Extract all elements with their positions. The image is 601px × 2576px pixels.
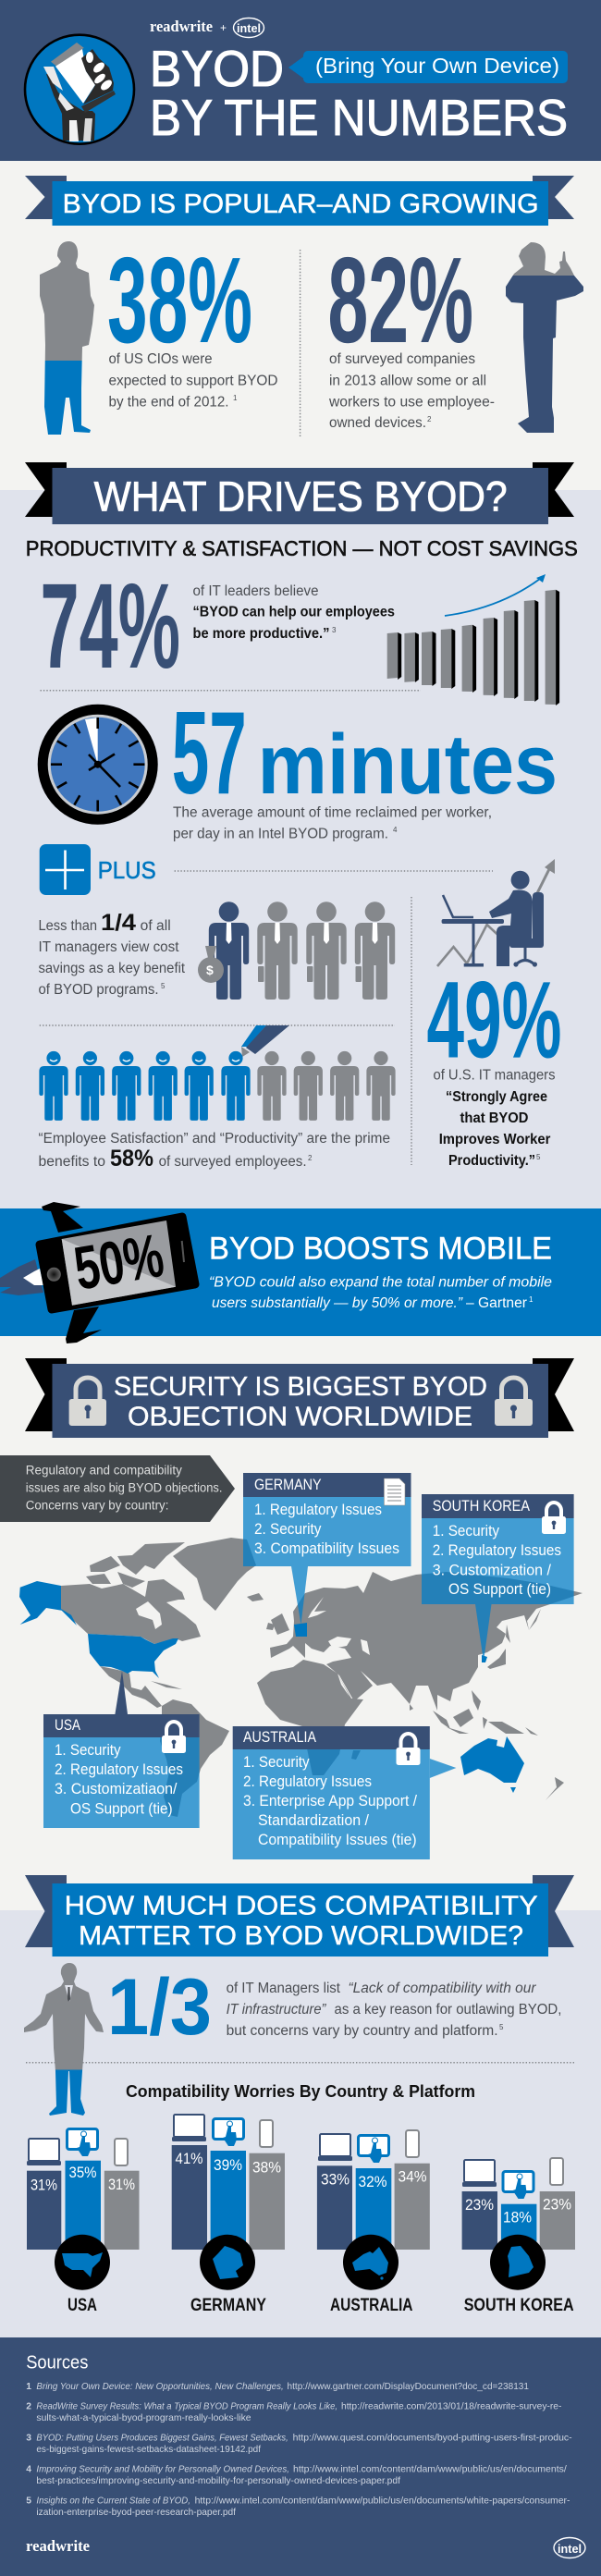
world map <box>19 1538 583 1817</box>
stat: 49 percent: Improves Worker <box>439 1132 550 1147</box>
quote: “BYOD could also expand the total number of mobile <box>209 1275 552 1291</box>
stat: 57 minutes: The average amount of time reclaimed per worker, <box>173 804 492 820</box>
logo: intel <box>233 18 264 37</box>
panel: BYOD boosts mobile <box>0 1202 601 1343</box>
stat: one third <box>107 1963 561 2052</box>
text: employee satisfaction: benefits to <box>39 1154 105 1170</box>
chart: USA <box>27 2128 139 2315</box>
stat: 74 percent: 74% <box>41 558 180 693</box>
callout: Australia: 1. Security <box>243 1754 310 1771</box>
chart: Germany: 39% <box>214 2156 242 2174</box>
icon: right lock <box>495 1378 533 1426</box>
chart: USA: 31% <box>31 2176 57 2193</box>
source 4 <box>26 2464 567 2486</box>
stat: 74 percent: 3 <box>332 626 337 634</box>
text: less than one quarter: Less than <box>39 918 97 934</box>
stat: 57 minutes: minutes <box>258 718 558 812</box>
source 5 <box>26 2496 570 2518</box>
stat: 82 percent: 2 <box>427 415 432 423</box>
callout: Australia: AUSTRALIA <box>243 1728 317 1746</box>
source 5: Insights on the Current State of BYOD, <box>36 2496 190 2506</box>
pictogram: four managers <box>198 902 395 1000</box>
callout: bring your own device: (Bring Your Own Device) <box>315 54 559 78</box>
text: employee satisfaction: 58% <box>110 1146 153 1171</box>
source 4: 4 <box>26 2464 31 2474</box>
stat: 38 percent: expected to support BYOD <box>109 374 277 388</box>
figure: man on phone <box>506 242 583 433</box>
text: less than one quarter: savings as a key benefit <box>39 961 186 976</box>
callout: regulatory intro: Regulatory and compatibility <box>26 1463 182 1477</box>
icon: rocket phone <box>0 1202 195 1343</box>
chart: Germany: 38% <box>252 2158 281 2177</box>
icon: worker at desk with rising chart <box>437 859 555 967</box>
quote: – Gartner <box>466 1295 527 1311</box>
source 3: 3 <box>26 2433 31 2443</box>
stat: 38 percent: of US CIOs were <box>109 351 213 367</box>
source 5: http://www.intel.com/content/dam/www/public/us/en/documents/white-papers/consumer- <box>195 2496 570 2506</box>
chart title: Compatibility Worries By Country & Platform <box>126 2082 475 2101</box>
stat: 82 percent: owned devices. <box>329 415 426 431</box>
chart: rising 3D bars <box>387 574 559 705</box>
source 1 <box>26 2382 529 2392</box>
stat: 49 percent: that BYOD <box>460 1110 529 1126</box>
callout: Australia: Standardization / <box>258 1812 369 1829</box>
source 3: es-biggest-gains-fewest-setbacks-datasheet-19142.pdf <box>36 2445 261 2455</box>
callout: USA <box>43 1671 200 1828</box>
callout: regulatory intro: Concerns vary by country: <box>26 1499 168 1513</box>
icon: clock <box>38 705 158 825</box>
callout: South Korea: OS Support (tie) <box>448 1581 551 1598</box>
figure: shrugging man <box>24 1963 104 2116</box>
banner: what drives BYOD: WHAT DRIVES BYOD? <box>94 473 508 521</box>
source 2 <box>26 2401 561 2423</box>
callout: bring your own device <box>288 51 568 83</box>
panel: header <box>0 0 601 161</box>
callout: South Korea <box>422 1494 574 1662</box>
manager navy with money bag: $ <box>206 963 214 977</box>
stat: 57 minutes: per day in an Intel BYOD program. <box>173 827 388 842</box>
banner: security: OBJECTION WORLDWIDE <box>128 1403 472 1432</box>
callout: regulatory intro: issues are also big BYOD objections. <box>26 1480 222 1494</box>
source 3: BYOD: Putting Users Produces Biggest Gains, Fewest Setbacks, <box>36 2433 288 2443</box>
manager grey <box>355 902 395 1000</box>
text: less than one quarter: of BYOD programs. <box>39 982 159 998</box>
stat: 57 minutes: 57 <box>172 687 247 818</box>
callout: South Korea: 1. Security <box>433 1523 500 1539</box>
chart: South Korea <box>462 2158 575 2315</box>
callout: Germany: 3. Compatibility Issues <box>254 1540 399 1557</box>
text: employee satisfaction: 2 <box>308 1154 313 1162</box>
stat: 82 percent <box>327 232 495 431</box>
banner: compatibility: HOW MUCH DOES COMPATIBILITY <box>65 1892 538 1921</box>
banner: what drives BYOD <box>25 462 574 524</box>
banner: compatibility <box>25 1875 574 1957</box>
source 5: 5 <box>26 2496 31 2506</box>
text: less than one quarter: 5 <box>161 982 166 990</box>
pictogram: ten employees, six highlighted <box>39 1051 396 1121</box>
logo plus sign: + <box>220 21 227 34</box>
figure: man grey and blue <box>40 241 94 435</box>
callout: USA: 3. Customizatiaon/ <box>55 1781 178 1797</box>
panel: sources <box>0 2337 601 2576</box>
source 1: http://www.gartner.com/DisplayDocument?doc_cd=238131 <box>287 2382 529 2392</box>
stat: one third: as a key reason for outlawing BYOD, <box>335 2002 561 2018</box>
text: employee satisfaction: “Employee Satisfaction” and “Productivity” are the prime <box>39 1131 390 1147</box>
chart: South Korea: SOUTH KOREA <box>464 2296 574 2315</box>
callout: USA: 2. Regulatory Issues <box>55 1761 183 1778</box>
stat: 49 percent <box>427 959 562 1169</box>
callout: Germany: 1. Regulatory Issues <box>254 1502 382 1518</box>
stat: 82 percent: workers to use employee- <box>328 394 495 411</box>
stat: 82 percent: in 2013 allow some or all <box>329 374 486 388</box>
source 2: ReadWrite Survey Results: What a Typical BYOD Program Really Looks Like, <box>36 2401 337 2411</box>
banner: BYOD is popular <box>25 176 574 226</box>
text: less than one quarter: of all <box>141 918 171 934</box>
subheading: PRODUCTIVITY & SATISFACTION — NOT COST SAVINGS <box>26 536 578 560</box>
quote: 1 <box>529 1295 534 1304</box>
source 4: Improving Security and Mobility for Personally Owned Devices, <box>36 2464 289 2474</box>
stat: one third: of IT Managers list <box>227 1981 341 1996</box>
stat: 57 minutes <box>172 687 558 842</box>
stat: one third: IT infrastructure” <box>227 2002 326 2018</box>
icon: document <box>384 1478 405 1505</box>
heading: sources: Sources <box>26 2353 88 2374</box>
stat: 74 percent: of IT leaders believe <box>192 583 318 599</box>
stat: 49 percent: Productivity.” <box>448 1153 535 1169</box>
title: BYOD: BYOD <box>150 40 284 97</box>
logo: readwrite footer: readwrite <box>26 2537 90 2555</box>
source 2: sults-what-a-typical-byod-program-really-looks-like <box>36 2413 251 2423</box>
chart: Germany <box>172 2115 285 2315</box>
chart: Germany: 41% <box>176 2150 203 2167</box>
stat: one third: “Lack of compatibility with our <box>348 1981 536 1996</box>
stat: 49 percent: 5 <box>536 1153 541 1161</box>
callout: South Korea: SOUTH KOREA <box>433 1497 531 1515</box>
logo: intel: intel <box>237 21 261 35</box>
callout: regulatory intro <box>0 1455 235 1522</box>
stat: 82 percent: 82% <box>327 232 473 368</box>
quote <box>209 1275 552 1311</box>
banner: compatibility: MATTER TO BYOD WORLDWIDE? <box>79 1921 523 1951</box>
icon: left lock <box>69 1378 106 1426</box>
arrow: growth curve <box>445 574 546 616</box>
quote: users substantially — by 50% or more.” <box>212 1295 463 1311</box>
chart: USA: 31% <box>108 2176 135 2193</box>
chart: Germany: GERMANY <box>190 2296 266 2315</box>
callout: USA: USA <box>55 1716 81 1734</box>
stat: 38 percent <box>107 232 277 411</box>
stat: 74 percent: “BYOD can help our employees <box>192 605 395 620</box>
banner: security: SECURITY IS BIGGEST BYOD <box>114 1372 487 1402</box>
callout: USA: OS Support (tie) <box>70 1801 173 1818</box>
stat: 74 percent: be more productive.” <box>192 626 329 642</box>
title: by the numbers: BY THE NUMBERS <box>150 89 568 146</box>
chart: Australia: 34% <box>398 2167 427 2186</box>
chart: USA: USA <box>67 2296 97 2315</box>
stat: 38 percent: 38% <box>107 232 252 368</box>
icon: hand holding phone <box>25 35 134 144</box>
chart: Australia: 33% <box>321 2171 350 2188</box>
source 2: http://readwrite.com/2013/01/18/readwrite-survey-re- <box>341 2401 561 2411</box>
callout: Australia <box>233 1726 456 1859</box>
callout: South Korea: 2. Regulatory Issues <box>433 1542 561 1559</box>
logo: readwrite: readwrite <box>150 18 213 35</box>
source 1: Bring Your Own Device: New Opportunities, New Challenges, <box>36 2382 284 2392</box>
heading: plus: PLUS <box>98 856 156 884</box>
manager grey <box>257 902 298 1000</box>
source 1: 1 <box>26 2382 31 2392</box>
stat: 57 minutes: 4 <box>393 826 398 834</box>
text: employee satisfaction: of surveyed employees. <box>159 1154 307 1170</box>
callout: USA: 1. Security <box>55 1742 121 1759</box>
callout: South Korea: 3. Customization / <box>433 1562 551 1578</box>
callout: Germany <box>243 1473 411 1625</box>
manager navy with money bag <box>198 902 249 1000</box>
manager grey <box>306 902 347 1000</box>
stat: one third: 1/3 <box>107 1963 212 2052</box>
icon: lock <box>162 1722 186 1753</box>
source 2: 2 <box>26 2401 31 2411</box>
logo: intel footer <box>554 2537 585 2558</box>
chart: Australia: AUSTRALIA <box>330 2296 413 2315</box>
text: employee satisfaction <box>39 1131 390 1171</box>
banner: security <box>25 1358 574 1438</box>
callout: Germany: GERMANY <box>254 1476 322 1493</box>
stat: 38 percent: 1 <box>233 394 238 402</box>
stat: 49 percent: of U.S. IT managers <box>433 1068 556 1084</box>
icon: lock <box>542 1503 566 1534</box>
source 3: http://www.quest.com/documents/byod-putting-users-first-produc- <box>293 2433 572 2443</box>
chart: South Korea: 23% <box>465 2196 494 2214</box>
callout: Australia: Compatibility Issues (tie) <box>258 1832 417 1848</box>
icon: plus box <box>40 844 91 895</box>
icon: pencil <box>241 1025 289 1057</box>
source 3 <box>26 2433 572 2455</box>
chart: Australia <box>317 2130 430 2315</box>
banner: BYOD is popular: BYOD IS POPULAR–AND GROWING <box>63 190 539 219</box>
chart: South Korea: 23% <box>543 2195 571 2214</box>
callout: Australia: 2. Regulatory Issues <box>243 1773 372 1790</box>
callout: Germany: 2. Security <box>254 1521 322 1538</box>
heading: BYOD BOOSTS MOBILE <box>209 1232 552 1267</box>
chart: USA: 35% <box>68 2164 96 2181</box>
stat: 74 percent <box>41 558 395 693</box>
source 4: best-practices/improving-security-and-mobility-for-personally-owned-devices-paper.pdf <box>36 2476 400 2486</box>
stat: one third: 5 <box>499 2023 504 2031</box>
source 4: http://www.intel.com/content/dam/www/public/us/en/documents/ <box>293 2464 567 2474</box>
stat: 82 percent: of surveyed companies <box>329 351 475 367</box>
stat: 49 percent: “Strongly Agree <box>446 1089 547 1105</box>
logo: intel footer: intel <box>558 2542 582 2556</box>
icon: lock <box>396 1734 420 1765</box>
source 5: ization-enterprise-byod-peer-research-paper.pdf <box>36 2508 236 2518</box>
chart: South Korea: 18% <box>503 2208 532 2226</box>
chart: Australia: 32% <box>359 2173 386 2190</box>
stat: 38 percent: by the end of 2012. <box>109 394 229 411</box>
text: less than one quarter: 1/4 <box>101 910 136 936</box>
text: less than one quarter <box>39 910 186 998</box>
callout: Australia: 3. Enterprise App Support / <box>243 1793 417 1809</box>
text: less than one quarter: IT managers view cost <box>39 939 179 955</box>
icon: rocket phone: 50% <box>69 1221 168 1303</box>
stat: one third: but concerns vary by country and platform. <box>227 2023 498 2039</box>
